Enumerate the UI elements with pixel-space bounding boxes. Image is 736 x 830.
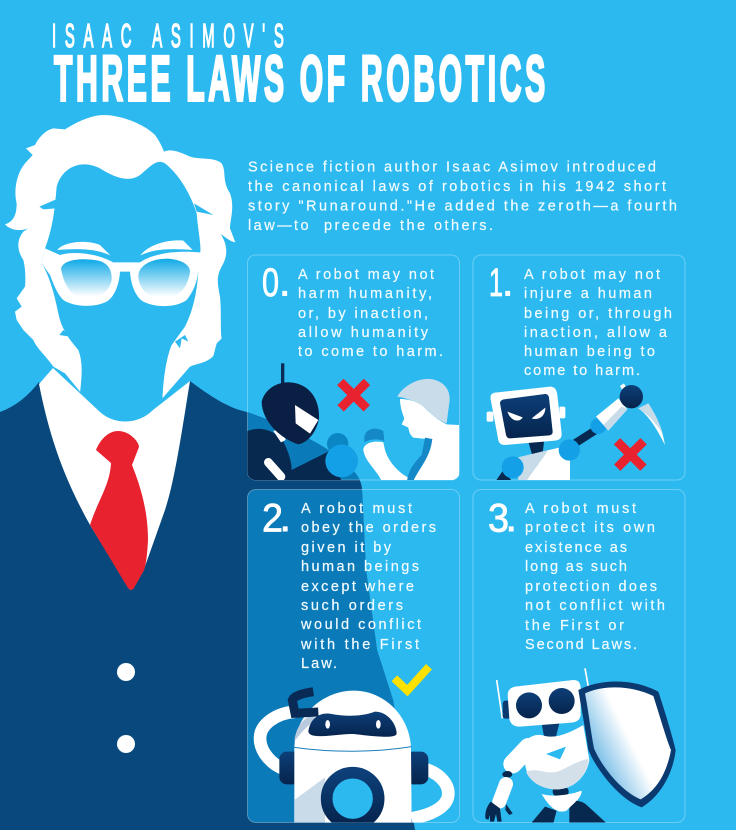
law 2 text: human beings	[301, 559, 419, 575]
robot left arm	[496, 471, 512, 480]
robot left shoulder	[502, 456, 524, 478]
pelvis	[542, 791, 582, 812]
robot body	[294, 691, 412, 824]
law 1 text: human being to	[524, 344, 655, 360]
intro text: Science fiction author Isaac Asimov introduced	[248, 160, 656, 176]
robot shoulder pill	[268, 462, 281, 477]
law 3 text	[525, 501, 665, 653]
law 0 text: to come to harm.	[298, 344, 443, 360]
robot upper arm	[574, 428, 598, 444]
number 2: .	[280, 502, 290, 540]
robot visor	[295, 405, 318, 434]
forearm	[499, 784, 506, 802]
panel outline	[473, 490, 685, 822]
law 3 text: the First or	[525, 618, 624, 634]
red cross	[337, 379, 370, 411]
seam	[294, 747, 412, 751]
robot eyes	[516, 688, 575, 718]
law 1 text	[524, 267, 672, 379]
panel outline	[248, 255, 460, 480]
ear pads	[279, 752, 428, 784]
law 2 text: obey the orders	[301, 520, 436, 536]
robot right shoulder	[559, 439, 580, 461]
law 2 text: would conflict	[300, 617, 421, 633]
law 1 text: come to harm.	[524, 363, 640, 379]
robot neck piece	[273, 430, 286, 442]
law 3 text: protect its own	[525, 520, 655, 536]
hair strand notches	[39, 199, 213, 348]
law 2 text: A robot must	[301, 501, 412, 517]
shield	[578, 681, 676, 807]
chest ring	[327, 773, 379, 825]
law 2 text: except where	[301, 579, 414, 595]
human hair	[397, 379, 450, 423]
robot neck	[528, 442, 544, 454]
number 1: 1	[489, 261, 503, 305]
law 0 text: allow humanity	[298, 325, 429, 341]
robot torso	[518, 445, 570, 481]
illustration: robot with shield	[485, 668, 676, 823]
ear	[503, 701, 511, 719]
torso	[523, 725, 589, 789]
body shadow	[294, 777, 325, 824]
number 0: 0	[262, 261, 279, 305]
number 2: 2	[262, 496, 283, 540]
law 0 text	[298, 267, 443, 360]
red cross	[614, 438, 647, 471]
torso shadow	[518, 450, 548, 481]
robot left arm ring	[260, 712, 295, 769]
number 0: .	[280, 266, 289, 304]
antennas	[497, 668, 588, 718]
jacket buttons	[117, 663, 135, 753]
robot screen	[500, 394, 553, 438]
panel outline	[473, 255, 685, 480]
robot head	[491, 387, 562, 445]
head shadow	[294, 716, 317, 742]
robot forearm	[596, 398, 627, 431]
intro text: the canonical laws of robotics in his 1942 short	[248, 179, 666, 195]
law 1 text: injure a human	[524, 286, 652, 302]
number 3: 3	[488, 496, 509, 540]
portrait: Isaac Asimov figure	[0, 115, 415, 830]
human forearm band	[407, 438, 432, 481]
law 3 text: not conflict with	[525, 598, 665, 614]
law 2 text: such orders	[301, 598, 403, 614]
robot body and arm	[245, 429, 342, 481]
legs	[531, 801, 607, 823]
robot antenna	[281, 363, 284, 385]
human forearm and fist	[363, 442, 408, 481]
shirt	[39, 368, 190, 590]
illustration: obedient robot	[260, 667, 448, 825]
neck	[542, 723, 559, 739]
law 0 text: A robot may not	[298, 267, 434, 283]
law 1 text: being or, through	[524, 306, 672, 322]
subtitle: ISAAC ASIMOV'S	[52, 19, 284, 55]
intro text	[248, 160, 677, 234]
eyebrows	[57, 240, 193, 256]
jacket	[0, 381, 415, 830]
law 1 text: inaction, allow a	[524, 325, 668, 341]
scythe blade	[638, 403, 665, 445]
number 3: .	[506, 502, 516, 540]
torso shadow	[526, 759, 589, 789]
title block	[52, 19, 545, 115]
law 0 text: harm humanity,	[298, 286, 432, 302]
human fist top	[364, 429, 384, 442]
law 3 text: Second Laws.	[525, 637, 637, 653]
chest triangle	[546, 747, 566, 759]
robot elbow	[590, 418, 606, 434]
face	[42, 162, 200, 400]
law 2 text: given it by	[301, 540, 392, 556]
law 1 text: A robot may not	[524, 267, 660, 283]
waist	[553, 786, 569, 798]
tie	[90, 431, 148, 590]
robot hand	[620, 385, 643, 408]
number 1: .	[503, 266, 512, 304]
robot ears	[487, 407, 565, 422]
robot fist	[325, 433, 358, 477]
glasses lenses	[61, 259, 190, 299]
law 0 text: or, by inaction,	[298, 306, 428, 322]
law 3 text: protection does	[525, 579, 657, 595]
robot head	[508, 680, 581, 727]
law 3 text: existence as	[525, 540, 627, 556]
law 2 text: with the First	[300, 637, 419, 653]
hair and beard	[5, 115, 235, 398]
hook antenna	[292, 692, 318, 713]
eyes	[325, 720, 381, 729]
hand	[485, 802, 513, 822]
panel: law 1	[473, 255, 685, 481]
law 3 text: long as such	[525, 559, 627, 575]
head	[5, 115, 235, 400]
panel: law 3	[473, 490, 685, 823]
panel tint over jacket	[248, 412, 360, 480]
main title: THREE LAWS OF ROBOTICS	[54, 43, 545, 115]
panel: law 2	[240, 480, 460, 830]
panel: law 0	[247, 254, 460, 480]
law 2 text: Law.	[301, 656, 337, 672]
visor	[308, 712, 397, 737]
robot head	[262, 382, 319, 444]
law 2 text	[300, 501, 436, 672]
illustration: robot fighting human	[245, 363, 459, 481]
shield face	[585, 687, 671, 799]
upper arm	[513, 747, 528, 764]
human torso and head	[400, 399, 459, 481]
elbow	[502, 771, 512, 778]
illustration: robot with scythe	[487, 383, 665, 481]
yellow check mark	[394, 667, 429, 691]
scythe tip	[620, 383, 626, 389]
intro text: story "Runaround."He added the zeroth—a fourth	[248, 198, 677, 214]
law 3 text: A robot must	[525, 501, 636, 517]
glasses frame	[42, 248, 202, 306]
robot right arm ring	[412, 768, 448, 818]
robot eyes	[507, 408, 545, 421]
intro text: law—to precede the others.	[248, 218, 493, 234]
panel outline	[248, 490, 460, 822]
panel tint over jacket	[248, 490, 412, 822]
